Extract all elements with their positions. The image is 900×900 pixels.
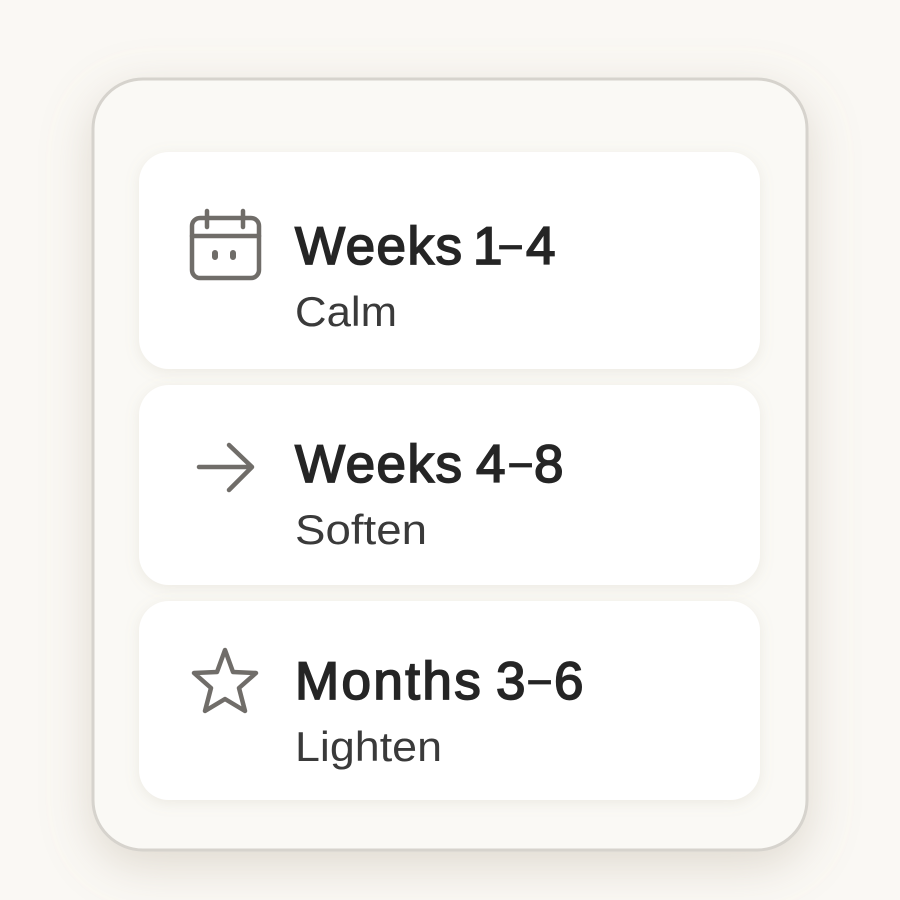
text: soften: Soften (295, 506, 427, 553)
heading: weeks 4-8: 8 (534, 435, 563, 494)
icon: calendar (192, 211, 259, 278)
text: calm: Calm (295, 288, 397, 335)
icon: arrow (199, 445, 252, 490)
heading: months 3-6: Months (295, 652, 483, 711)
heading: months 3-6: – (529, 659, 551, 701)
panel: months 3-6 (139, 601, 760, 800)
heading: weeks 1-4: Weeks (295, 217, 464, 276)
panel: outer card (93, 79, 807, 850)
heading: weeks 4-8: – (510, 442, 532, 484)
panel: weeks 4-8 (139, 385, 760, 585)
heading: weeks 4-8: Weeks (295, 435, 464, 494)
heading: weeks 1-4: – (500, 224, 522, 266)
heading: weeks 1-4: 1 (473, 217, 502, 276)
icon: star (194, 650, 256, 711)
heading: months 3-6: 3 (496, 652, 525, 711)
heading: weeks 1-4: 4 (526, 217, 555, 276)
heading: weeks 4-8: 4 (476, 435, 505, 494)
heading: months 3-6: 6 (554, 652, 583, 711)
panel: weeks 1-4 (139, 152, 760, 369)
text: lighten: Lighten (295, 723, 442, 770)
